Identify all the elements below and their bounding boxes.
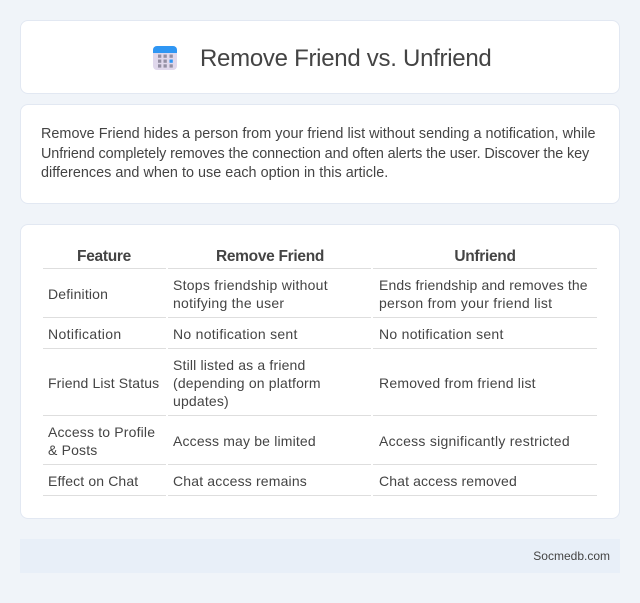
table rows: updates) — [173, 393, 229, 409]
table headers: Feature — [77, 248, 131, 265]
table rows: Access significantly restricted — [379, 433, 570, 449]
table rows: person from your friend list — [379, 295, 552, 311]
panel: introduction — [20, 104, 620, 204]
table rows: Removed from friend list — [379, 375, 536, 391]
panel: title card — [20, 20, 620, 94]
table rows: (depending on platform — [173, 375, 321, 391]
table rows: Effect on Chat — [48, 473, 138, 489]
table rows: Notification — [48, 326, 122, 342]
title: Remove Friend vs. Unfriend — [200, 45, 492, 72]
table rows: Access to Profile — [48, 424, 155, 440]
table rows: Still listed as a friend — [173, 357, 305, 373]
footer bar — [20, 539, 620, 573]
table rows: Chat access removed — [379, 473, 517, 489]
table headers — [77, 248, 516, 265]
table headers: Remove Friend — [216, 248, 324, 265]
intro text: Unfriend completely removes the connection and often alerts the user. Discover the key — [41, 146, 589, 162]
panel: comparison table — [20, 224, 620, 519]
table rows: Access may be limited — [173, 433, 316, 449]
table rows: Friend List Status — [48, 375, 159, 391]
table rows: No notification sent — [379, 326, 504, 342]
table headers: Unfriend — [454, 248, 516, 265]
table rows: Ends friendship and removes the — [379, 277, 588, 293]
table rows: No notification sent — [173, 326, 298, 342]
table rows: Stops friendship without — [173, 277, 328, 293]
icon: calendar — [153, 46, 177, 70]
table rows: notifying the user — [173, 295, 284, 311]
table rows: & Posts — [48, 442, 97, 458]
intro text: differences and when to use each option in this article. — [41, 165, 388, 181]
table rows: Definition — [48, 286, 108, 302]
intro text: Remove Friend hides a person from your friend list without sending a notification, while — [41, 126, 595, 142]
footer text: Socmedb.com — [533, 549, 610, 563]
intro text — [41, 126, 595, 181]
table rows: Chat access remains — [173, 473, 307, 489]
